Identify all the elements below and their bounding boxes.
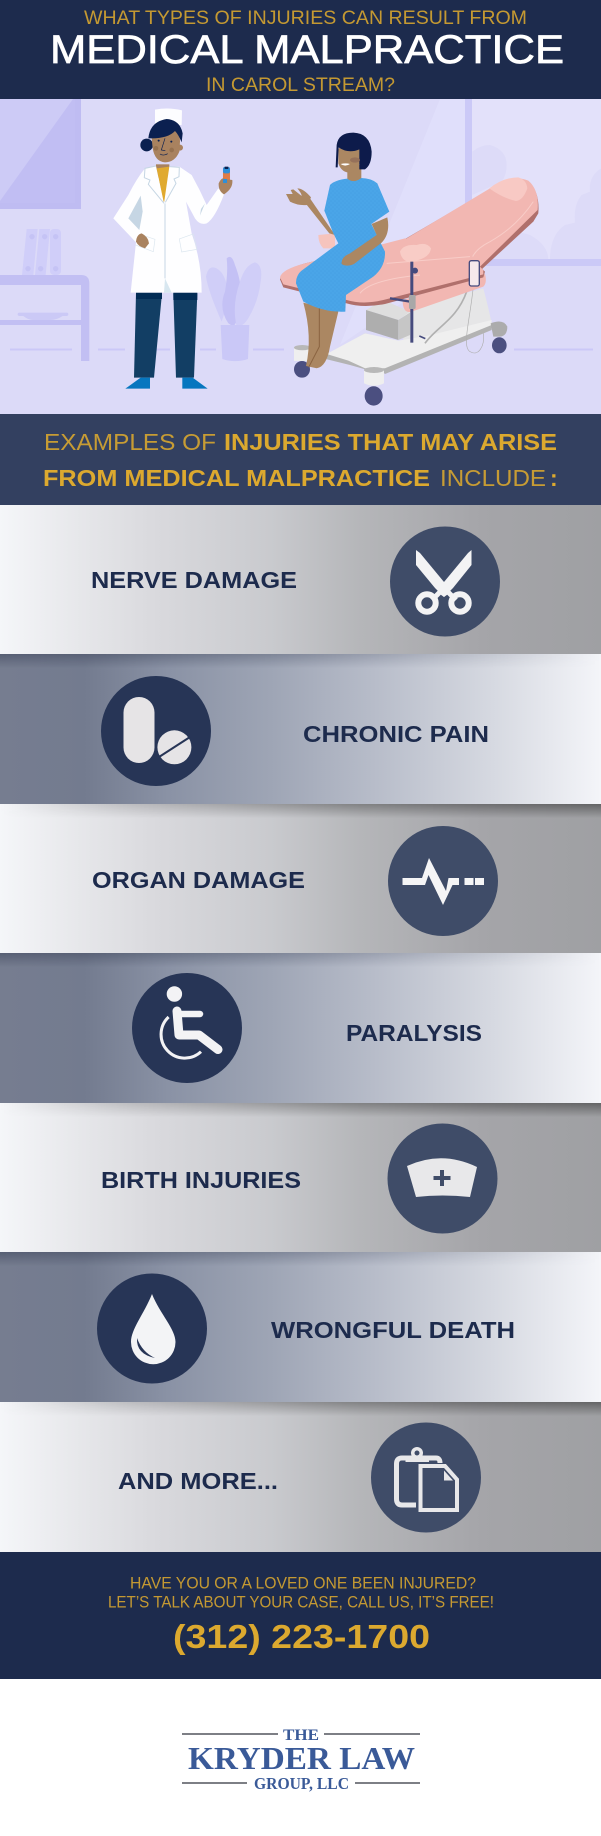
label: chronic pain: CHRONIC PAIN (303, 721, 489, 747)
nurse shoes (125, 378, 208, 389)
row: nerve damage (0, 505, 601, 654)
header banner (0, 0, 601, 99)
nurse head (140, 108, 183, 162)
patient forearm (342, 217, 388, 266)
side table with binders (0, 229, 89, 361)
row: birth injuries (0, 1103, 601, 1252)
nurse figure (113, 108, 232, 389)
icon: clipboard (371, 1422, 481, 1532)
subheading line two (43, 465, 558, 491)
icon: blood drop (97, 1274, 207, 1384)
subheading line one: EXAMPLES OF (44, 429, 216, 455)
nurse trousers (134, 293, 197, 378)
subheading band (0, 414, 601, 505)
row: organ damage (0, 804, 601, 953)
label: paralysis: PARALYSIS (346, 1020, 482, 1046)
phone number: (312) 223-1700 (173, 1618, 430, 1655)
patient gown (296, 178, 389, 312)
patient figure (286, 133, 389, 368)
icon: nurse cap (388, 1124, 498, 1234)
exam chair (280, 177, 539, 406)
label: birth injuries: BIRTH INJURIES (101, 1167, 301, 1193)
heading line: what types of injuries: WHAT TYPES OF INJURIES CAN RESULT FROM (84, 7, 527, 29)
stirrup pole and device (390, 244, 479, 343)
icon: wheelchair (132, 973, 242, 1083)
subheading line two: : (550, 465, 558, 491)
logo: the kryder law group (182, 1727, 420, 1793)
cta line one: HAVE YOU OR A LOVED ONE BEEN INJURED? (130, 1574, 476, 1592)
logo word: the: THE (283, 1727, 319, 1744)
icon: heartbeat line (388, 826, 498, 936)
light beam and outside window (340, 99, 601, 345)
chair base (294, 287, 507, 406)
illustration panel: clinic scene (0, 99, 601, 414)
floor lines (10, 348, 593, 350)
subheading line one (44, 429, 557, 455)
patient head (336, 133, 372, 173)
title: medical malpractice: MEDICAL MALPRACTICE (50, 28, 564, 72)
subheading line two: INCLUDE (440, 465, 546, 491)
patient neck (347, 165, 361, 182)
icon: scissors (390, 526, 500, 636)
subheading line two: FROM MEDICAL MALPRACTICE (43, 465, 430, 491)
label: organ damage: ORGAN DAMAGE (92, 867, 305, 893)
row: wrongful death (0, 1252, 601, 1402)
nurse hands and bottle (136, 167, 232, 248)
chair cushions (280, 177, 539, 312)
logo word: kryder law: KRYDER LAW (188, 1740, 415, 1776)
nurse coat (113, 164, 224, 293)
left window (0, 99, 81, 209)
subheading line one: INJURIES THAT MAY ARISE (224, 429, 557, 455)
row: chronic pain (0, 654, 601, 804)
row: paralysis (0, 953, 601, 1103)
row: and more (0, 1402, 601, 1552)
cta line two: LET’S TALK ABOUT YOUR CASE, CALL US, IT’S FREE! (108, 1594, 494, 1612)
icon: pills (101, 676, 211, 786)
label: nerve damage: NERVE DAMAGE (91, 567, 297, 593)
call to action band (0, 1552, 601, 1679)
label: wrongful death: WRONGFUL DEATH (271, 1317, 515, 1343)
patient arm and hand (286, 188, 335, 235)
patient legs (303, 303, 338, 368)
potted plant (206, 257, 261, 361)
label: and more: AND MORE... (118, 1468, 278, 1494)
logo word: group llc: GROUP, LLC (254, 1774, 349, 1793)
heading line: in carol stream: IN CAROL STREAM? (206, 74, 395, 96)
